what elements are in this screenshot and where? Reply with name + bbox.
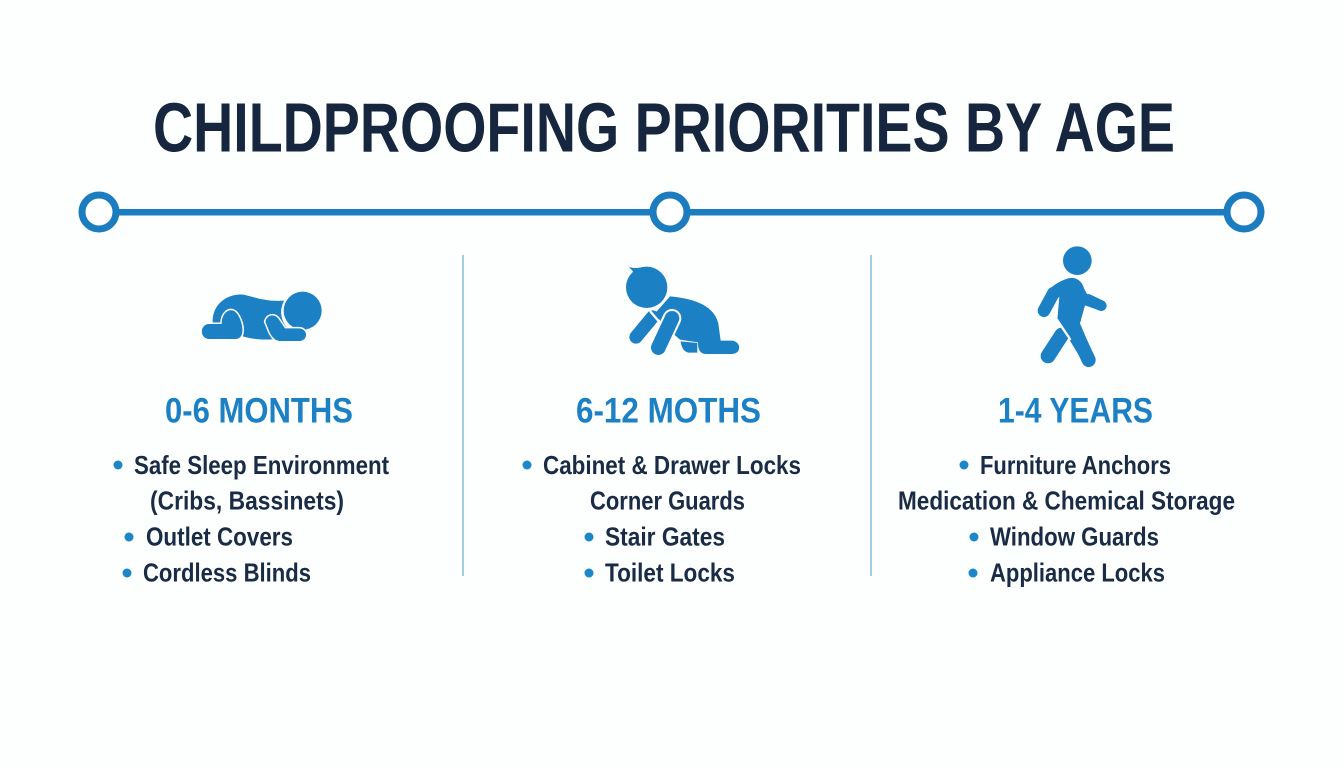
checklist: 6-12 months: Corner Guards <box>590 486 745 516</box>
icon: baby lying on tummy <box>202 292 322 341</box>
checklist: 1-4 years <box>898 450 1235 588</box>
icon: walking child <box>1044 246 1103 363</box>
checklist: 0-6 months: (Cribs, Bassinets) <box>150 486 344 516</box>
checklist: 6-12 months: Stair Gates <box>605 522 725 552</box>
heading: 0-6 months: 0-6 MONTHS <box>165 392 353 430</box>
timeline node: 1-4 years <box>1227 195 1261 229</box>
checklist: 1-4 years: Appliance Locks <box>990 558 1165 588</box>
checklist: 6-12 months: Toilet Locks <box>605 558 735 588</box>
panel: 6-12 months <box>522 267 801 588</box>
icon: crawling baby <box>626 267 739 354</box>
timeline <box>82 195 1261 229</box>
timeline node: 6-12 months <box>653 195 687 229</box>
checklist: 0-6 months <box>114 450 389 588</box>
checklist: 0-6 months: Outlet Covers <box>146 522 293 552</box>
checklist: 1-4 years: Window Guards <box>990 522 1159 552</box>
checklist: 1-4 years: Furniture Anchors <box>980 450 1171 480</box>
checklist: 0-6 months: Cordless Blinds <box>143 558 311 588</box>
heading: 6-12 moths: 6-12 MOTHS <box>576 392 761 430</box>
panel: 1-4 years <box>898 246 1235 588</box>
checklist: 6-12 months <box>522 450 801 588</box>
checklist: 1-4 years: Medication & Chemical Storage <box>898 486 1235 516</box>
heading: 1-4 years: 1-4 YEARS <box>998 392 1153 430</box>
checklist: 6-12 months: Cabinet & Drawer Locks <box>543 450 801 480</box>
timeline node: 0-6 months <box>82 195 116 229</box>
panel: 0-6 months <box>114 292 389 588</box>
checklist: 0-6 months: Safe Sleep Environment <box>134 450 389 480</box>
